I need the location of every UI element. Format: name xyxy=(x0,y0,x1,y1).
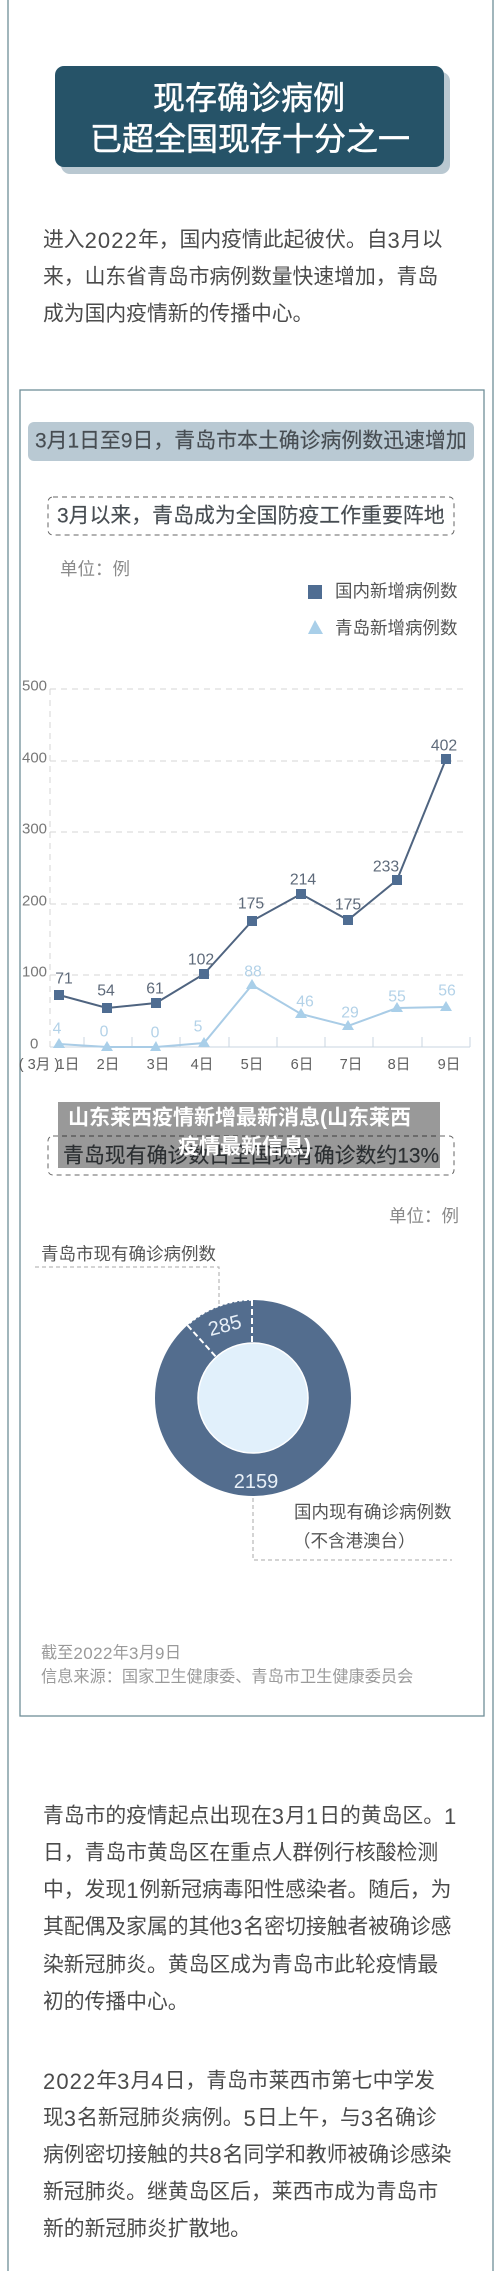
paragraph: Huangdao origin: 染新冠肺炎。黄岛区成为青岛市此轮疫情最 xyxy=(43,1954,438,1976)
paragraph: Huangdao origin: 中，发现1例新冠病毒阳性感染者。随后，为 xyxy=(43,1878,451,1902)
paragraph: Laixi spread: 2022年3月4日，青岛市莱西市第七中学发 xyxy=(43,2068,435,2094)
paragraph: Huangdao origin: 其配偶及家属的其他3名密切接触者被确诊感 xyxy=(43,1914,451,1940)
line chart: 56 xyxy=(438,982,456,1000)
callout: Qingdao cases: 青岛市现有确诊病例数 xyxy=(41,1244,216,1264)
donut chart: 285 xyxy=(206,1311,244,1341)
line chart: 175 xyxy=(335,896,361,914)
donut chart: 2159 xyxy=(234,1471,278,1493)
panel: data charts xyxy=(20,390,484,1716)
line chart: 9日 xyxy=(438,1057,460,1073)
dashed subtitle: line chart: 3月以来，青岛成为全国防疫工作重要阵地 xyxy=(57,504,445,528)
line chart: 6日 xyxy=(291,1057,313,1073)
line chart: 102 xyxy=(188,952,214,968)
paragraph: Laixi spread xyxy=(43,2068,452,2240)
line chart: 5 xyxy=(194,1018,203,1036)
line chart: 71 xyxy=(55,970,73,988)
line chart: 29 xyxy=(341,1004,359,1022)
paragraph: Laixi spread: 新冠肺炎。继黄岛区后，莱西市成为青岛市 xyxy=(43,2180,438,2204)
line chart: 200 xyxy=(22,892,47,910)
line chart: 0 xyxy=(30,1036,38,1052)
paragraph: Laixi spread: 现3名新冠肺炎病例。5日上午，与3名确诊 xyxy=(43,2106,437,2130)
intro paragraph: 成为国内疫情新的传播中心。 xyxy=(43,302,313,326)
intro paragraph xyxy=(43,228,443,326)
line chart: 54 xyxy=(97,982,115,1000)
line chart xyxy=(19,678,470,1073)
paragraph: Laixi spread: 病例密切接触的共8名同学和教师被确诊感染 xyxy=(43,2142,452,2168)
line chart: 4 xyxy=(53,1020,62,1038)
paragraph: Huangdao origin: 青岛市的疫情起点出现在3月1日的黄岛区。1 xyxy=(43,1804,457,1828)
line chart: 8日 xyxy=(388,1057,410,1073)
line chart: 3日 xyxy=(147,1057,169,1073)
intro paragraph: 进入2022年，国内疫情此起彼伏。自3月以 xyxy=(43,228,443,252)
paragraph: Huangdao origin: 日，青岛市黄岛区在重点人群例行核酸检测 xyxy=(43,1842,438,1864)
dashed subtitle: donut chart: 青岛现有确诊数占全国现有确诊数约13% xyxy=(63,1144,439,1168)
line chart: 88 xyxy=(244,964,262,980)
legend xyxy=(308,581,458,638)
title banner: 现存确诊病例 xyxy=(153,80,345,116)
paragraph: Huangdao origin: 初的传播中心。 xyxy=(43,1990,189,2014)
line chart: 300 xyxy=(22,820,47,838)
source note: 信息来源：国家卫生健康委、青岛市卫生健康委员会 xyxy=(41,1668,413,1686)
section heading strip xyxy=(28,422,474,461)
line chart: 500 xyxy=(22,678,47,694)
line chart: 46 xyxy=(296,994,314,1010)
legend: 青岛新增病例数 xyxy=(335,618,458,638)
overlay caption banner xyxy=(58,1102,440,1168)
overlay caption banner: 山东莱西疫情新增最新消息(山东莱西 xyxy=(68,1106,411,1130)
paragraph: Huangdao origin xyxy=(43,1804,457,2014)
intro paragraph: 来，山东省青岛市病例数量快速增加，青岛 xyxy=(43,266,438,288)
line chart: 5日 xyxy=(241,1057,263,1073)
line chart: 233 xyxy=(373,858,399,876)
line chart: 400 xyxy=(22,750,47,766)
line chart: 61 xyxy=(146,980,164,998)
donut chart xyxy=(155,1300,351,1496)
paragraph: Laixi spread: 新的新冠肺炎扩散地。 xyxy=(43,2218,251,2240)
unit label: line chart: 单位：例 xyxy=(60,559,130,579)
callout: national cases: （不含港澳台） xyxy=(293,1531,416,1551)
title banner xyxy=(55,66,450,174)
dashed subtitle: line chart xyxy=(48,497,454,535)
line chart: 2日 xyxy=(97,1057,119,1073)
overlay caption banner: 疫情最新信息) xyxy=(178,1134,311,1158)
title banner: 已超全国现存十分之一 xyxy=(90,121,410,157)
callout: national cases: 国内现有确诊病例数 xyxy=(294,1502,452,1522)
line chart: 55 xyxy=(388,988,406,1006)
legend: 国内新增病例数 xyxy=(335,581,458,601)
line chart: 214 xyxy=(290,872,316,888)
callout: Qingdao cases xyxy=(35,1244,219,1306)
line chart: 1日 xyxy=(57,1057,79,1073)
line chart: 0 xyxy=(100,1024,109,1040)
section heading strip: 3月1日至9日，青岛市本土确诊病例数迅速增加 xyxy=(35,430,467,452)
line chart: 100 xyxy=(22,964,47,980)
line chart: 7日 xyxy=(340,1057,362,1073)
line chart: 4日 xyxy=(191,1057,213,1073)
line chart: 0 xyxy=(151,1024,160,1042)
callout: national cases xyxy=(253,1498,452,1560)
line chart: ( 3月 ) xyxy=(19,1057,59,1073)
dashed subtitle: donut chart xyxy=(48,1136,454,1175)
source note xyxy=(41,1644,413,1686)
line chart: 175 xyxy=(238,896,264,912)
line chart: 402 xyxy=(431,738,457,754)
source note: 截至2022年3月9日 xyxy=(41,1644,181,1662)
unit label: donut chart: 单位：例 xyxy=(389,1206,459,1226)
